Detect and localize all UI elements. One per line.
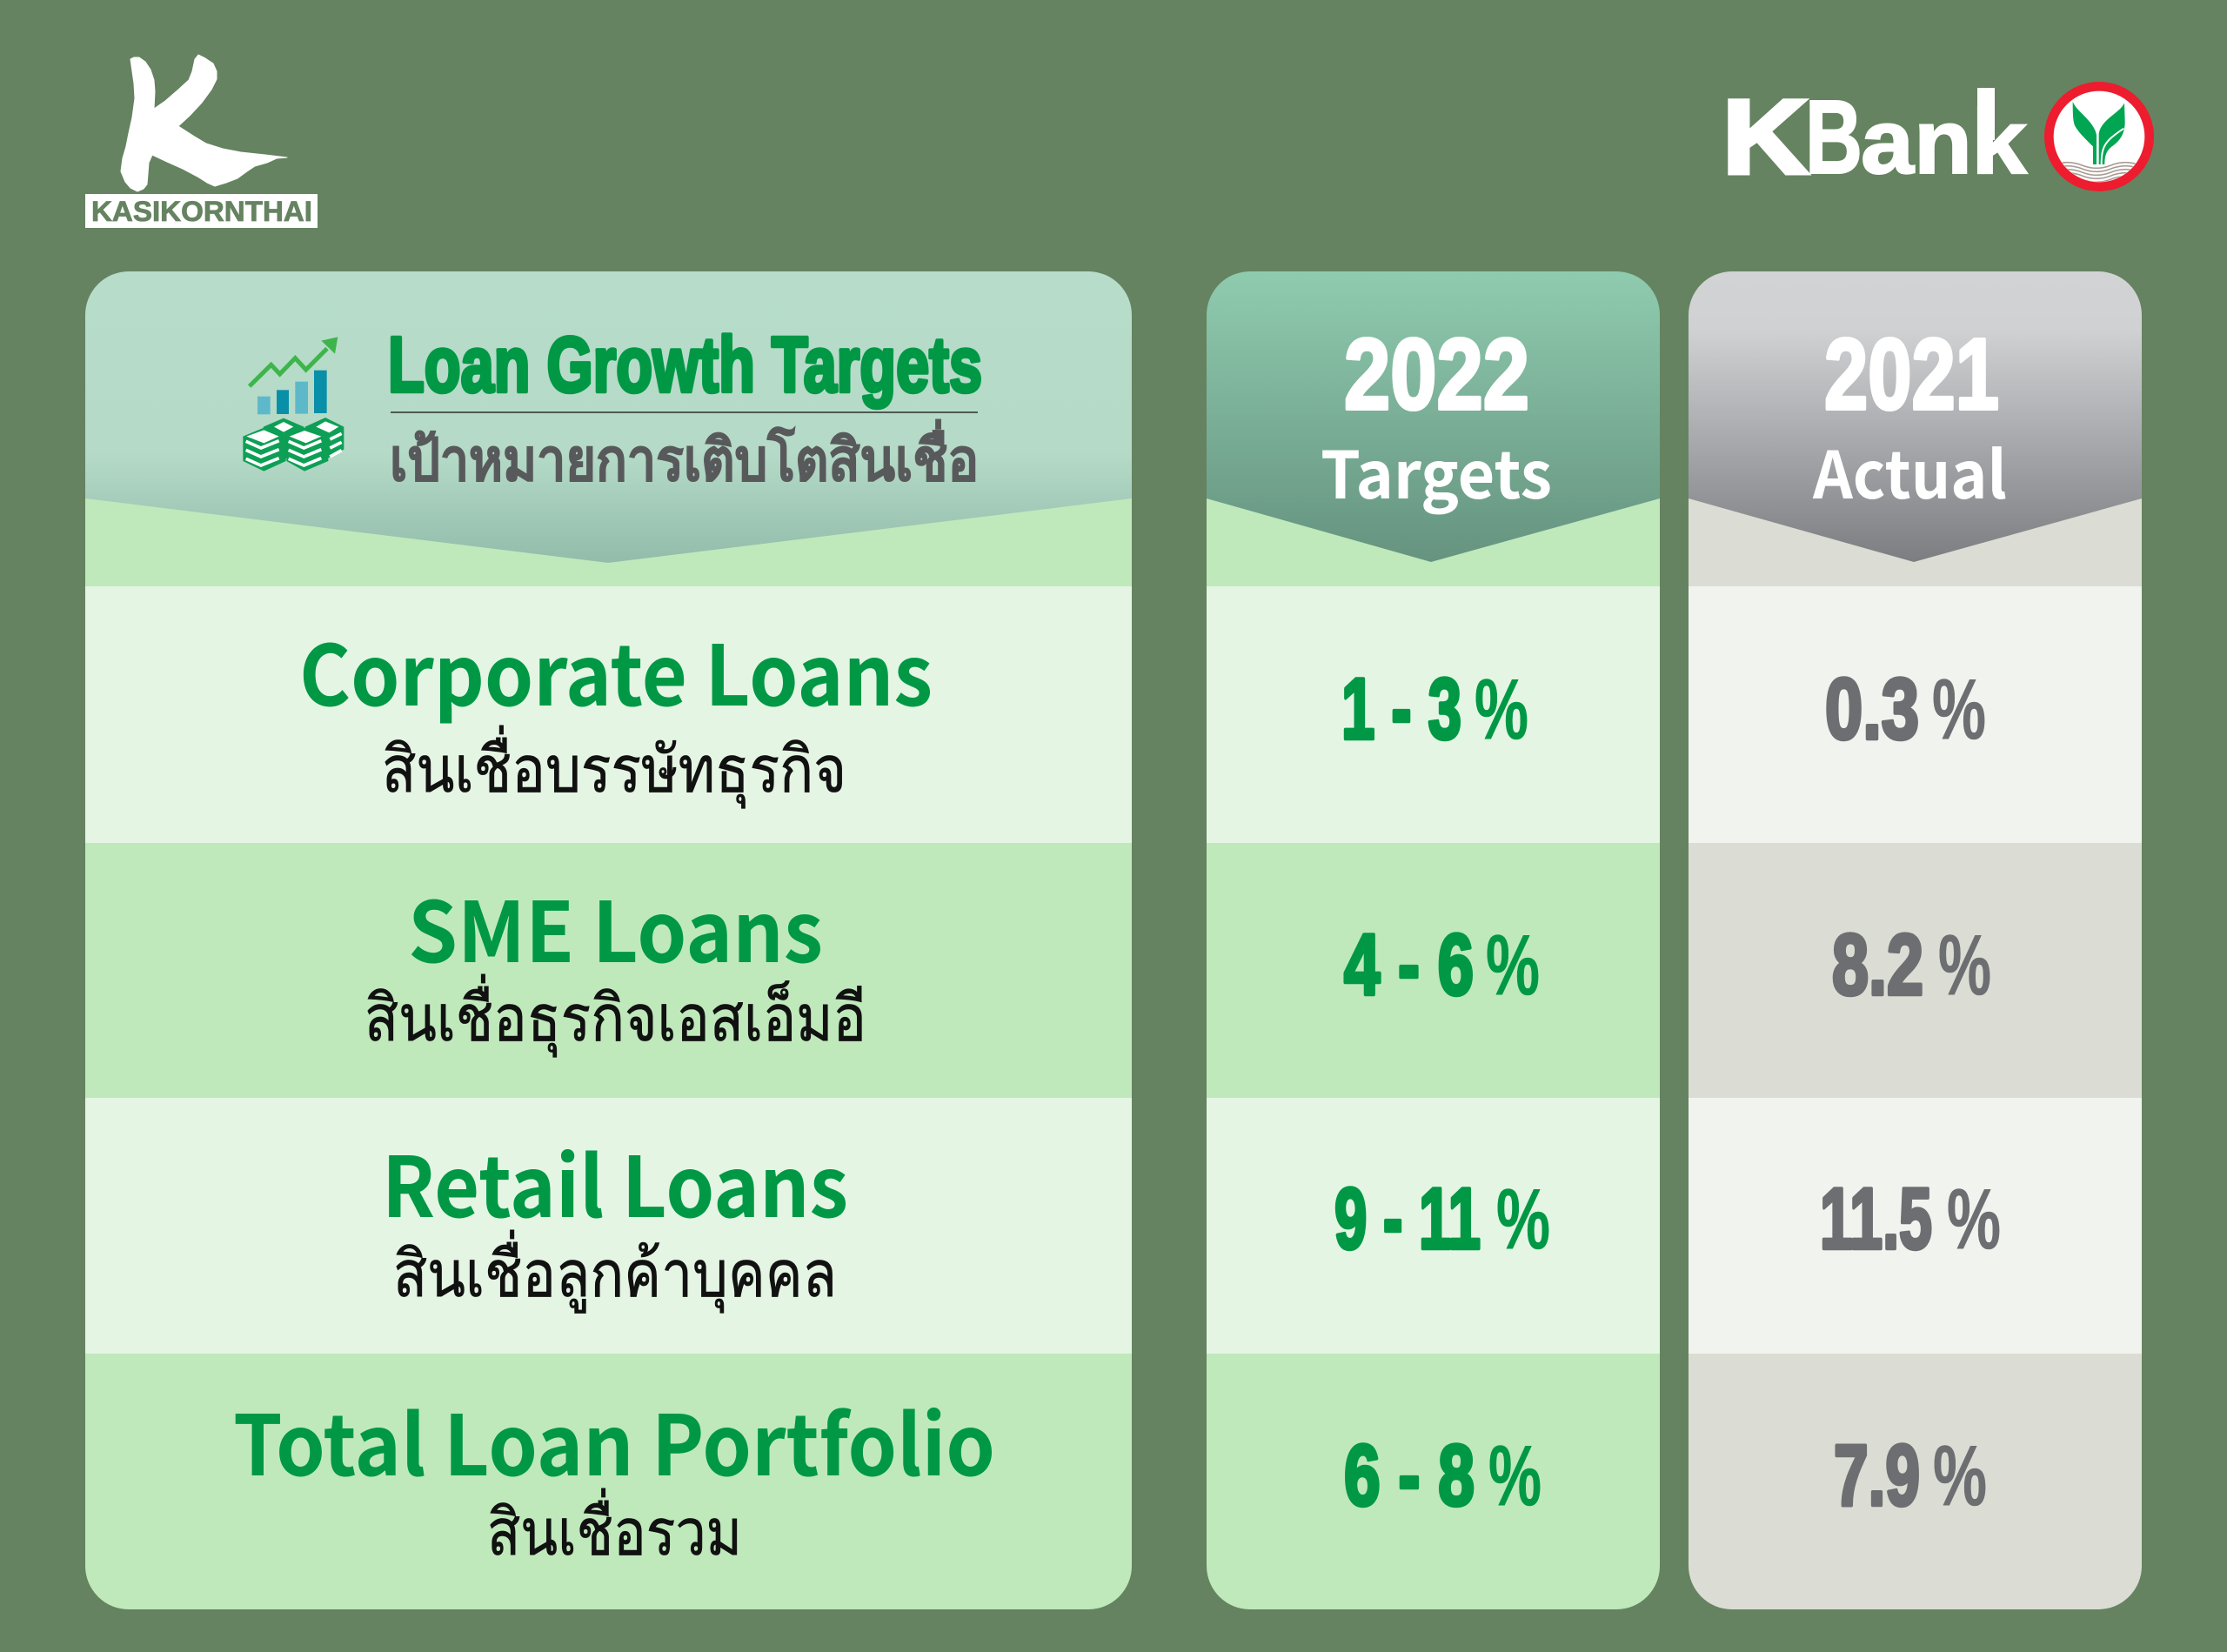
heading: Targets: Targets	[1321, 423, 1552, 518]
logo: Kasikornthai	[85, 55, 318, 228]
subheading thai: เป้าหมายการเติบโตสินเชื่อ	[390, 418, 979, 493]
value: retail target: 9 - 11	[1334, 1170, 1481, 1267]
value: SME target: 4 - 6	[1344, 916, 1474, 1013]
KBank wordmark: an	[1861, 91, 1972, 193]
heading: Actual: Actual	[1812, 423, 2007, 518]
row: total loan portfolio	[233, 1379, 995, 1568]
header chevron	[1689, 271, 2142, 562]
panel: 2022 targets	[1207, 271, 1660, 1609]
value: total actual: %	[1933, 1428, 1987, 1523]
value: retail target: %	[1496, 1171, 1550, 1267]
value: corporate target: 1 - 3	[1341, 660, 1461, 757]
heading: Loan Growth Targets: Loan Growth Targets	[388, 322, 982, 409]
row: SME loans: สินเชื่อธุรกิจเอสเอ็มอี	[364, 973, 866, 1058]
row: retail loans: สินเชื่อลูกค้าบุคคล	[393, 1229, 837, 1314]
value: SME actual: %	[1938, 917, 1991, 1013]
KBank wordmark	[1722, 77, 2028, 196]
value: SME actual: 8.2	[1832, 916, 1923, 1013]
row: corporate loans	[299, 609, 933, 809]
value: corporate actual: 0.3	[1825, 660, 1919, 757]
panel: 2021 actual	[1689, 271, 2142, 1609]
row: retail loans: Retail Loans	[382, 1120, 848, 1241]
logo wordmark plate	[85, 194, 318, 228]
heading divider	[391, 411, 978, 413]
value: corporate actual: %	[1932, 661, 1986, 757]
value: retail actual: %	[1947, 1171, 2001, 1267]
row: corporate loans: สินเชื่อบรรษัทธุรกิจ	[382, 725, 846, 809]
value: total actual: 7.9	[1834, 1427, 1920, 1523]
row: total loan portfolio: Total Loan Portfolio	[233, 1379, 995, 1500]
KBank wordmark: K	[1722, 77, 1808, 196]
icon: brush K	[121, 55, 287, 191]
KBank wordmark: k	[1971, 91, 2028, 193]
row: total loan portfolio: สินเชื่อรวม	[487, 1488, 742, 1568]
logo wordmark: KASIKORNTHAI	[91, 196, 312, 227]
header chevron	[85, 271, 1132, 563]
heading: 2021: 2021	[1824, 318, 1999, 431]
heading: 2022: 2022	[1344, 318, 1529, 431]
KBank wordmark: B	[1805, 77, 1863, 196]
value: corporate target: %	[1475, 661, 1528, 757]
row: SME loans: SME Loans	[408, 866, 823, 987]
value: total target: %	[1488, 1428, 1542, 1523]
icon: KBank seal	[2044, 82, 2154, 191]
logo: KBank	[1722, 77, 2154, 196]
value: SME target: %	[1486, 917, 1540, 1013]
value: retail actual: 11.5	[1820, 1170, 1932, 1267]
panel: loan categories	[85, 271, 1132, 1609]
value: total target: 6 - 8	[1344, 1427, 1475, 1523]
row: corporate loans: Corporate Loans	[299, 609, 933, 730]
row: SME loans	[364, 866, 866, 1058]
row: retail loans	[382, 1120, 848, 1314]
header chevron	[1207, 271, 1660, 562]
icon: growth chart and money	[243, 337, 344, 472]
